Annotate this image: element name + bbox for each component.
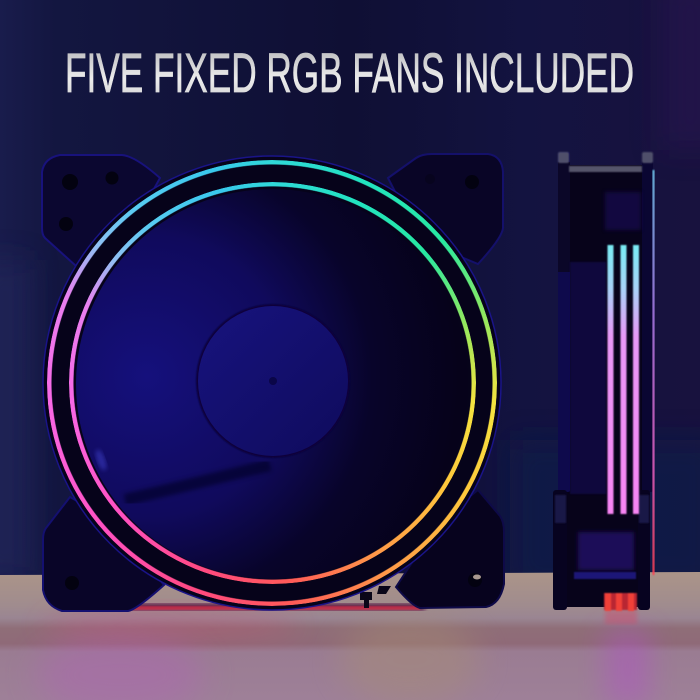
corner: top left (42, 155, 160, 266)
main fan frame (42, 154, 504, 611)
corner: bottom left (43, 497, 164, 611)
hub (196, 304, 350, 458)
mounting holes (59, 172, 482, 590)
ring body (43, 156, 501, 610)
side fan posts (553, 152, 653, 610)
fan glass (76, 189, 468, 579)
wooden table (0, 572, 700, 700)
side edge light (652, 170, 654, 575)
corner: bottom right (396, 490, 504, 608)
corner: top right (388, 154, 503, 264)
side fan (553, 152, 654, 611)
side RGB strips (608, 245, 639, 514)
inner RGB ring (69, 182, 476, 584)
red reflection (604, 593, 637, 611)
cable clip (360, 586, 391, 608)
outer RGB ring (47, 160, 497, 606)
